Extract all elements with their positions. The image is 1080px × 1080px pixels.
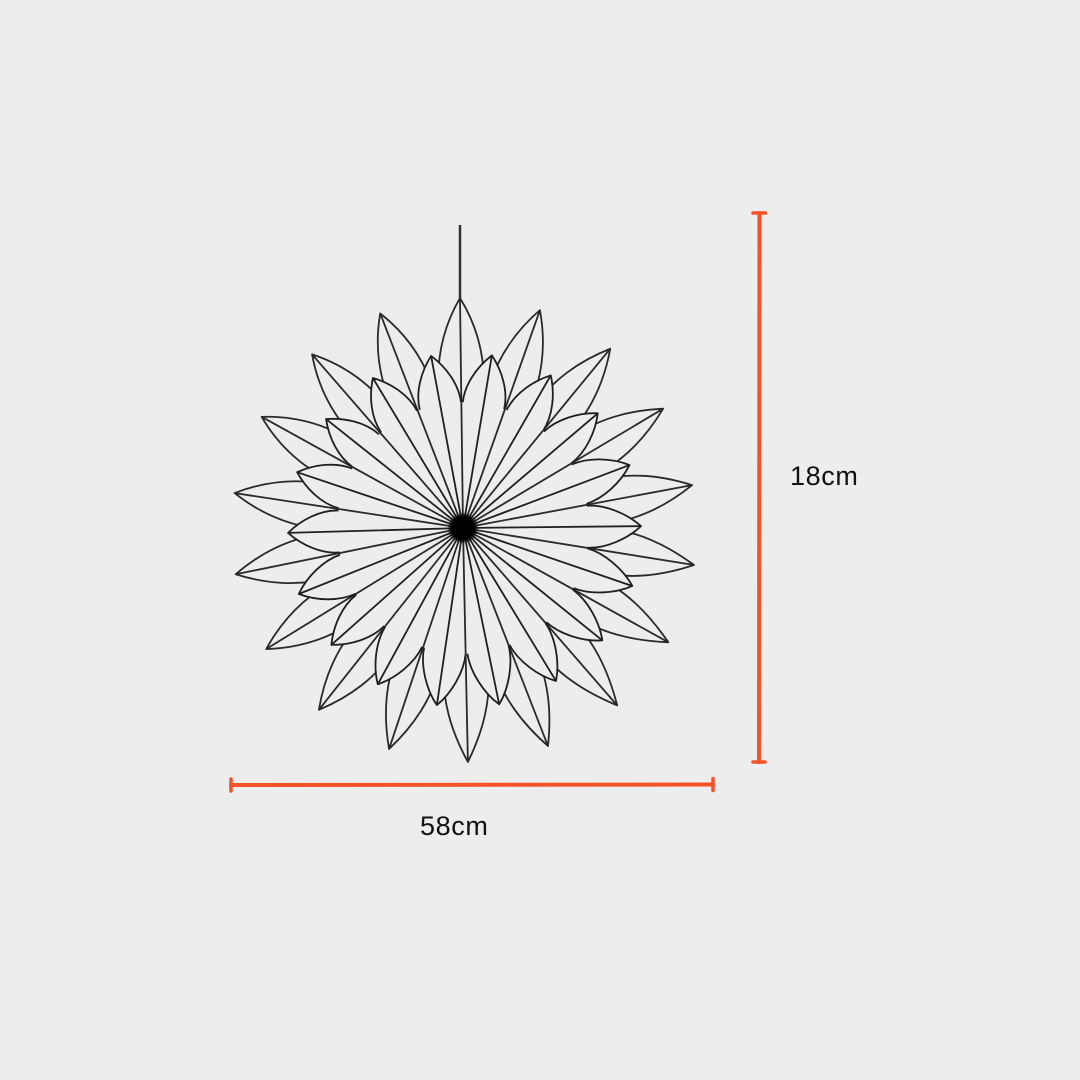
star centre hub [447, 512, 479, 544]
outer petal ring [231, 298, 698, 762]
width label: 58cm [420, 811, 488, 841]
icon: hanging cord [459, 225, 461, 299]
height dimension line [753, 213, 766, 762]
inner petal ring [287, 352, 641, 709]
illustration: paper star flower [231, 298, 698, 762]
width dimension line [231, 778, 713, 791]
height label: 18cm [790, 461, 858, 491]
